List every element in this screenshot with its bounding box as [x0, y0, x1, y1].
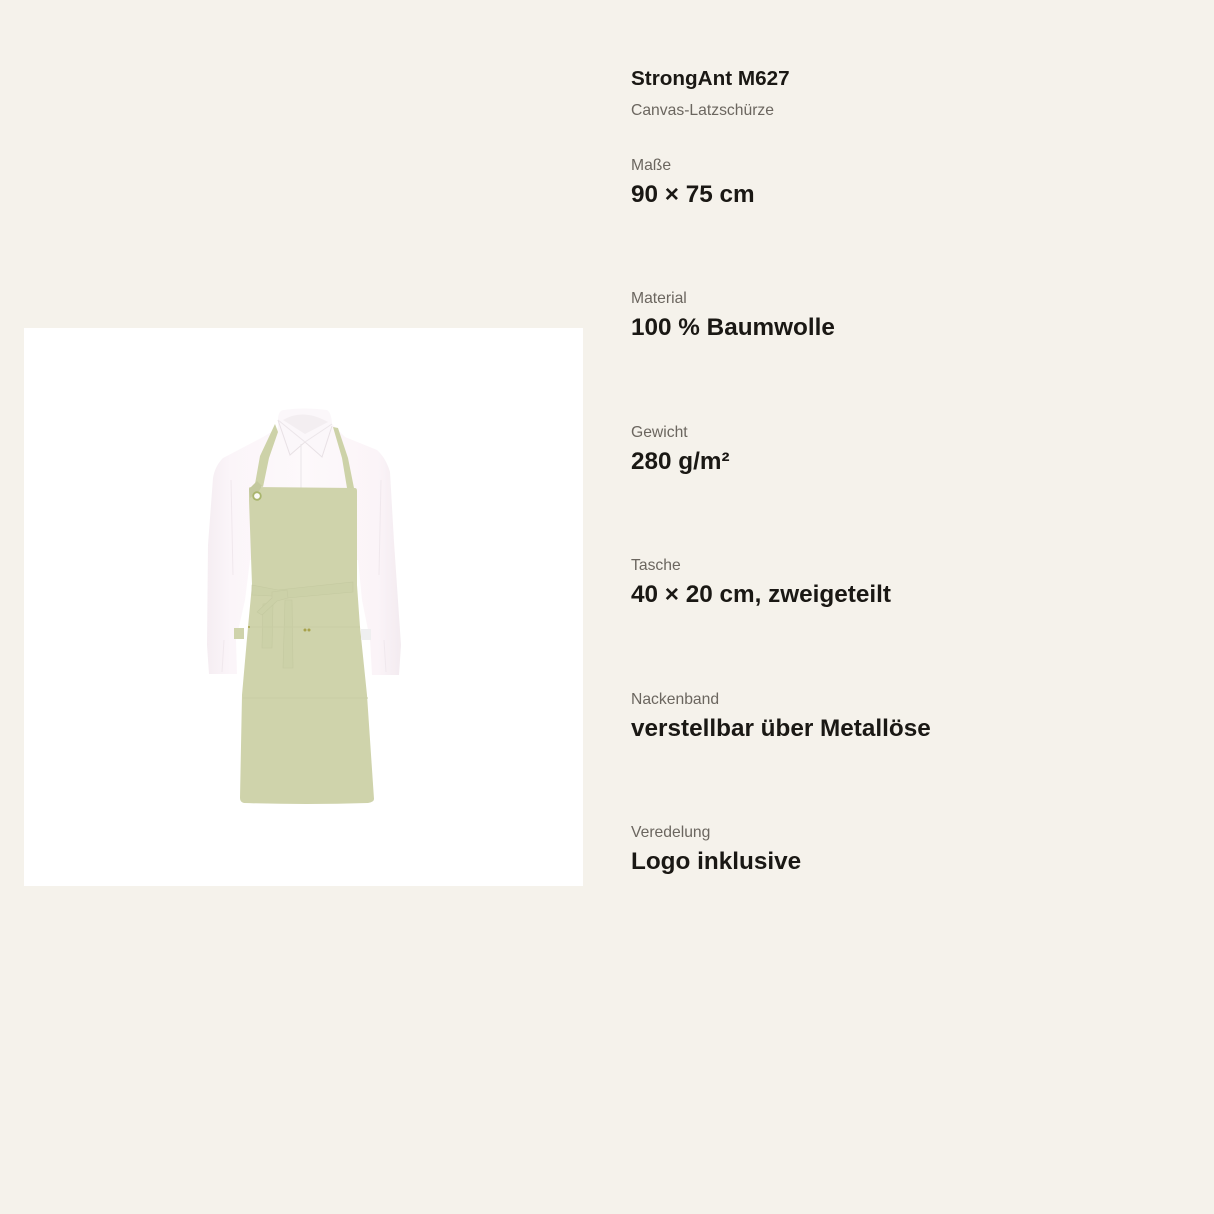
subtitle: Canvas-Latzschürze	[631, 102, 774, 119]
illustration: apron on white shirt	[207, 414, 401, 804]
metal eyelet	[249, 481, 262, 500]
spec: Maße: Maße	[631, 157, 671, 174]
neck straps	[255, 424, 354, 488]
spec: Nackenband	[631, 691, 931, 742]
spec: Gewicht: Gewicht	[631, 424, 688, 441]
spec: Tasche: Tasche	[631, 557, 681, 574]
spec: Veredelung: Logo inklusive	[631, 848, 801, 875]
spec: Gewicht: 280 g/m²	[631, 448, 730, 475]
spec: Veredelung: Veredelung	[631, 824, 710, 841]
spec: Veredelung	[631, 824, 801, 875]
panel: product photo	[24, 328, 582, 886]
spec: Material: 100 % Baumwolle	[631, 314, 835, 341]
spec: Maße: 90 × 75 cm	[631, 181, 755, 208]
spec: Material	[631, 290, 835, 341]
spec: Maße	[631, 157, 755, 208]
shirt	[207, 408, 401, 675]
spec: Tasche: 40 × 20 cm, zweigeteilt	[631, 581, 891, 608]
title: StrongAnt M627	[631, 67, 790, 90]
apron body	[240, 487, 374, 804]
pocket rivets	[248, 626, 310, 632]
spec: Gewicht	[631, 424, 730, 475]
pocket seams	[243, 627, 368, 698]
spec: Tasche	[631, 557, 891, 608]
spec: Nackenband: Nackenband	[631, 691, 719, 708]
cuff tabs	[234, 628, 371, 640]
spec: Nackenband: verstellbar über Metallöse	[631, 715, 931, 742]
waist tie and bow	[252, 582, 353, 668]
spec: Material: Material	[631, 290, 687, 307]
